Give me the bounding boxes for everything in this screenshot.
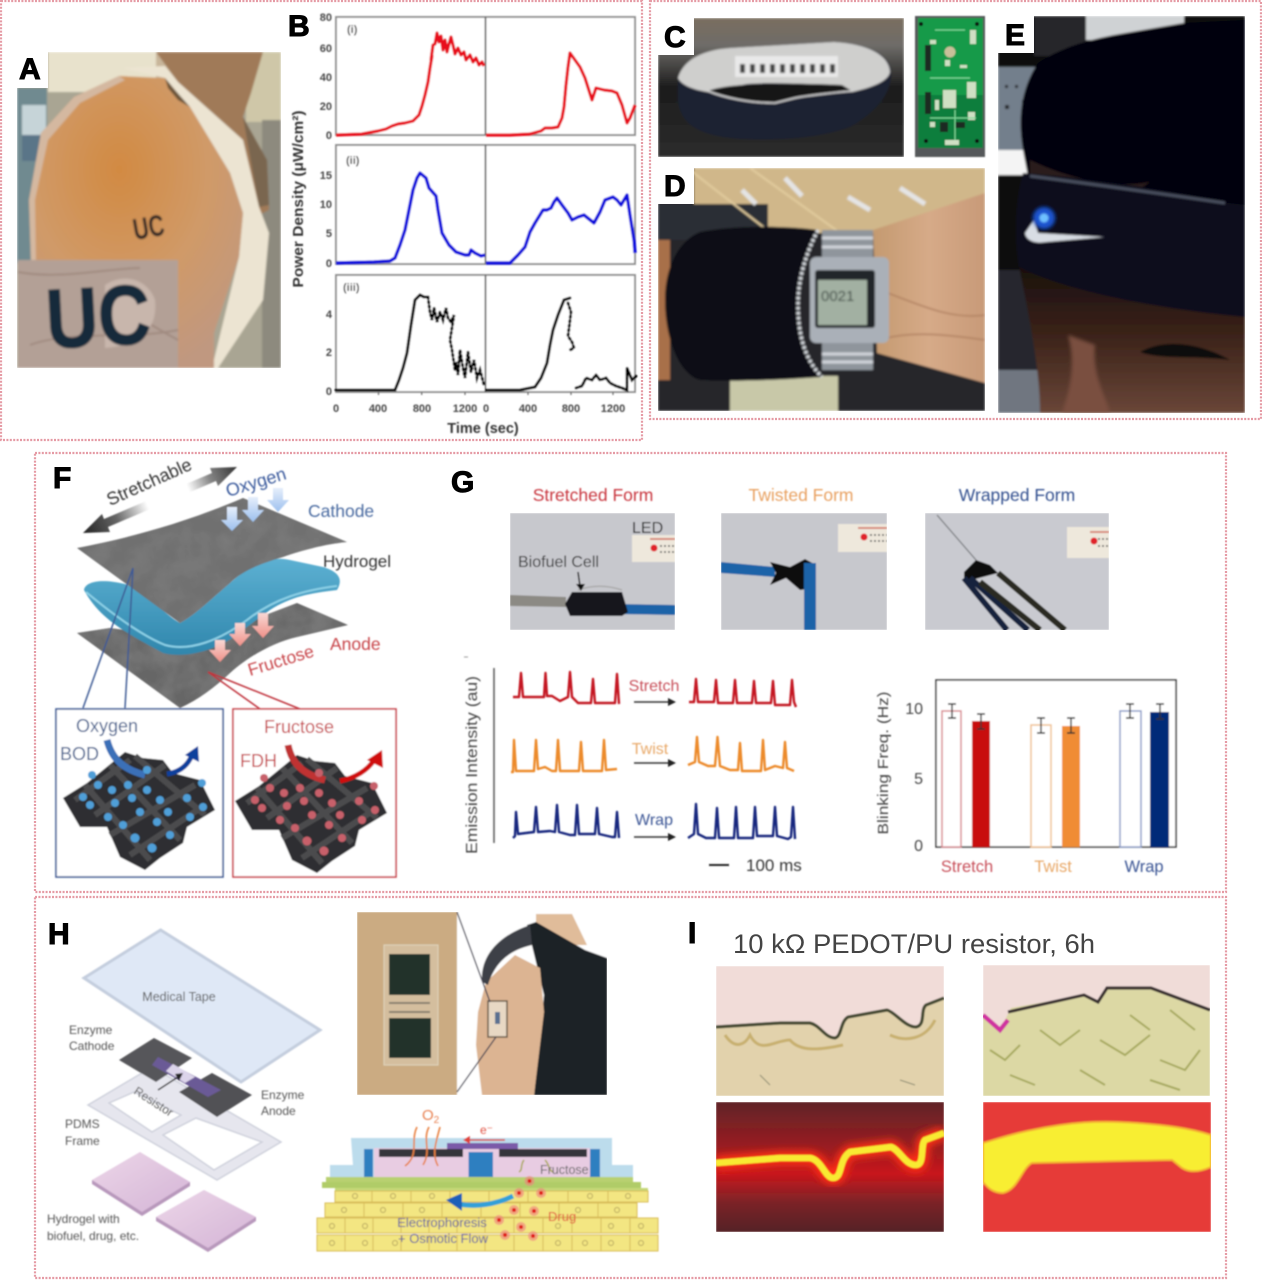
panel I title: 10 kΩ PEDOT/PU resistor, 6h <box>733 929 1095 959</box>
form headings: Twisted Form <box>748 485 854 505</box>
layer labels: Anode <box>261 1104 296 1118</box>
axis labels: (iii) <box>343 282 360 294</box>
axis labels: 15 <box>320 170 332 182</box>
chart: emission intensity traces <box>464 657 802 875</box>
anode sheet <box>77 603 348 708</box>
axis labels: 0 <box>326 130 332 142</box>
axis labels: Power Density (μW/cm²) <box>290 110 307 287</box>
drug dots <box>494 1176 546 1241</box>
cross-section labels: Electrophoresis <box>397 1215 487 1230</box>
axis labels: 400 <box>369 403 387 415</box>
inset: cathode enzyme BOD <box>56 709 223 877</box>
oxygen label: O <box>422 1107 434 1124</box>
callout lines <box>83 568 133 708</box>
axis labels: 60 <box>320 43 332 55</box>
photo E: headband with blue LED <box>998 16 1245 413</box>
wrap label and arrow <box>634 812 676 841</box>
inset: anode enzyme FDH <box>233 709 396 877</box>
hydrogel pads <box>92 1152 256 1252</box>
micrograph: brightfield, treated <box>983 965 1210 1096</box>
micrograph: fluorescence, treated <box>983 1102 1211 1232</box>
enzyme electrodes and resistor: Resistor <box>131 1084 176 1119</box>
axis labels: 800 <box>562 403 580 415</box>
photo A: UC tattoo on shoulder <box>17 52 281 368</box>
chart: blinking frequency bars: Wrap <box>1124 858 1164 876</box>
oxygen text: Oxygen <box>223 464 289 501</box>
stretch traces <box>513 672 796 707</box>
axis labels: 1200 <box>453 403 477 415</box>
tattoo text on arm: UC <box>130 207 167 247</box>
chart: blinking frequency bars <box>876 680 1176 876</box>
axis labels: 5 <box>326 228 332 240</box>
label B: B <box>288 10 310 43</box>
PDMS frame <box>88 1067 281 1180</box>
electron label: e⁻ <box>480 1123 493 1137</box>
photo: stretched form: LED <box>632 520 663 537</box>
photo C: headband with biofuel cell <box>658 18 904 157</box>
fructose arrows <box>209 613 274 662</box>
oxygen arrows <box>221 488 289 531</box>
panel: stretchable biofuel cell (F and G) <box>35 453 1226 892</box>
diagram F: layered device <box>56 454 396 877</box>
flow arrow <box>446 1193 513 1211</box>
layer labels: biofuel, drug, etc. <box>47 1229 139 1243</box>
micrograph: brightfield, control <box>716 966 944 1096</box>
photo D: wristband powering watch <box>658 168 985 411</box>
cross-section of patch on skin: Fructose <box>540 1163 589 1177</box>
axis labels: 10 <box>320 199 332 211</box>
layer labels: Enzyme <box>261 1088 305 1102</box>
axis labels: 1200 <box>601 403 625 415</box>
photo: wrapped form <box>925 513 1109 630</box>
twist traces <box>511 737 794 772</box>
form headings: Stretched Form <box>533 485 653 505</box>
photo: stretched form: Biofuel Cell <box>518 554 599 571</box>
wrap label and arrow: Wrap <box>635 812 673 829</box>
chart: blinking frequency bars: 10 <box>905 701 923 718</box>
stretch arrow <box>83 467 237 533</box>
chart: blinking frequency bars: Twist <box>1034 858 1072 876</box>
skin cell layers <box>317 1191 658 1251</box>
oxygen label: 2 <box>434 1115 440 1126</box>
label C background <box>658 18 694 55</box>
inset: anode enzyme FDH: Fructose <box>264 717 334 737</box>
layer labels <box>47 1023 305 1243</box>
layer labels: PDMS <box>65 1117 100 1131</box>
cathode sheet <box>77 498 347 623</box>
axis labels: (i) <box>347 24 358 36</box>
label A background <box>17 52 48 88</box>
label C: C <box>664 21 686 54</box>
axis labels: 0 <box>326 386 332 398</box>
label F: F <box>53 462 71 495</box>
medical tape: Medical Tape <box>142 990 216 1004</box>
axis labels: 20 <box>320 101 332 113</box>
label E: E <box>1005 19 1025 52</box>
chart: blinking frequency bars: 0 <box>914 838 923 855</box>
inset: cathode enzyme BOD: Oxygen <box>76 716 138 736</box>
photo: twisted form <box>721 513 887 630</box>
axis labels: 2 <box>326 347 332 359</box>
layer labels: Fructose <box>245 641 316 680</box>
chart: blinking frequency bars: Stretch <box>941 858 993 876</box>
chart B: power density traces <box>290 12 636 437</box>
label H: H <box>48 918 70 951</box>
trace (iii) black <box>336 295 636 390</box>
hydrogel layer <box>84 559 340 655</box>
axis labels: (ii) <box>346 155 360 167</box>
cross-section labels: Drug <box>548 1209 576 1224</box>
layer labels: Cathode <box>308 501 374 521</box>
trace (i) red <box>336 33 635 135</box>
panel: headband and wristband demos (C, D, E) <box>650 1 1261 419</box>
label D: D <box>664 170 686 203</box>
chart: blinking frequency bars: Blinking Freq. (Hz) <box>876 692 892 834</box>
inset: UC tattoo close-up <box>18 260 178 368</box>
time scale bar <box>709 856 802 875</box>
axis labels: 0 <box>483 403 489 415</box>
cross-section of patch on skin <box>317 1107 658 1251</box>
stretchable text: Stretchable <box>103 454 195 510</box>
form headings: Wrapped Form <box>959 485 1075 505</box>
cross-section labels: + Osmotic Flow <box>398 1231 489 1246</box>
axis labels: 4 <box>326 309 333 321</box>
axis labels <box>290 12 625 437</box>
photo: stretched form <box>510 513 675 630</box>
time scale bar: 100 ms <box>746 856 802 875</box>
layer labels: Enzyme <box>69 1023 113 1037</box>
enzyme electrodes and resistor <box>119 1038 252 1119</box>
exploded view of patch <box>47 930 320 1252</box>
label I: I <box>688 917 696 950</box>
layer labels: Hydrogel <box>323 552 391 571</box>
axis labels: Time (sec) <box>447 421 519 437</box>
axis labels: 0 <box>326 258 332 270</box>
layer labels <box>245 501 391 680</box>
micrograph: fluorescence, control <box>716 1102 944 1232</box>
layer labels: Cathode <box>69 1039 115 1053</box>
label D background <box>658 168 694 204</box>
chart: blinking frequency bars: 5 <box>914 771 923 788</box>
axis labels: 400 <box>519 403 537 415</box>
wrap traces <box>513 804 795 839</box>
chart: emission intensity traces: Emission Intensity (au) <box>464 676 481 854</box>
trace (ii) blue <box>336 173 635 263</box>
stretch label and arrow <box>629 678 679 706</box>
twist label and arrow: Twist <box>632 741 669 758</box>
medical tape <box>84 930 320 1082</box>
label A: A <box>19 53 41 86</box>
layer labels: Hydrogel with <box>47 1212 120 1226</box>
inset letters UC: UC <box>44 267 152 366</box>
layer labels: Anode <box>330 634 381 654</box>
twist label and arrow <box>632 741 676 767</box>
label G: G <box>451 466 474 499</box>
axis labels: 800 <box>413 403 431 415</box>
layer labels: Frame <box>65 1134 100 1148</box>
watch display: 0021 <box>821 288 854 305</box>
cross-section labels <box>397 1209 576 1246</box>
label E background <box>998 16 1034 53</box>
axis labels: 0 <box>333 403 339 415</box>
axis labels: 40 <box>320 72 332 84</box>
stretch label and arrow: Stretch <box>629 678 679 695</box>
inset: cathode enzyme BOD: BOD <box>60 744 99 764</box>
photo: patch on upper arm <box>357 912 607 1095</box>
inset: anode enzyme FDH: FDH <box>240 751 277 771</box>
axis labels: 80 <box>320 12 332 24</box>
panel: iontophoretic skin patch (H and I) <box>35 897 1226 1278</box>
form headings <box>533 485 1075 505</box>
photo: circuit board <box>915 16 985 157</box>
